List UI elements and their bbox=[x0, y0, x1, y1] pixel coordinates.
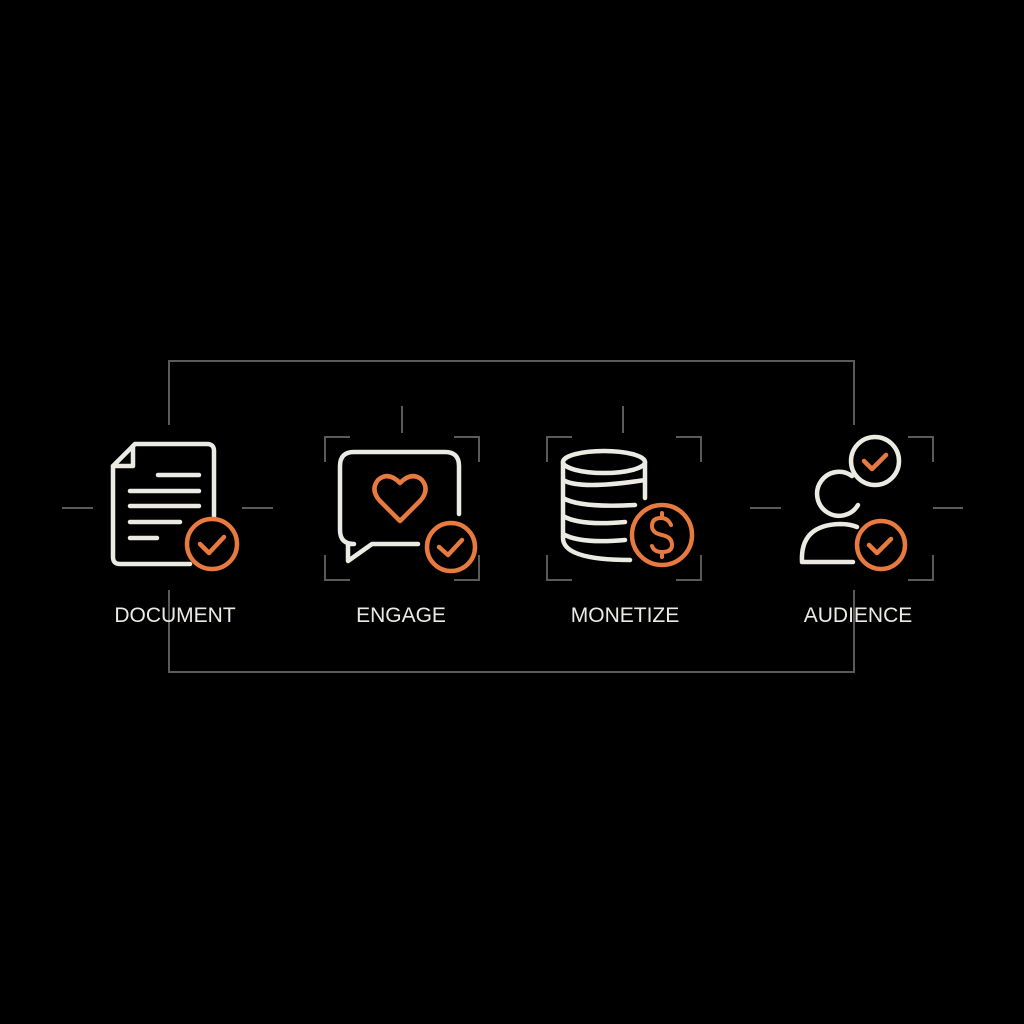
icon: document bbox=[113, 444, 237, 569]
label: audience: AUDIENCE bbox=[804, 604, 912, 627]
label: document: DOCUMENT bbox=[114, 604, 236, 627]
label: monetize: MONETIZE bbox=[571, 604, 679, 627]
icon: audience bbox=[802, 437, 905, 569]
icon: monetize bbox=[563, 451, 692, 565]
label: engage: ENGAGE bbox=[356, 604, 446, 627]
icon: engage bbox=[340, 452, 475, 571]
